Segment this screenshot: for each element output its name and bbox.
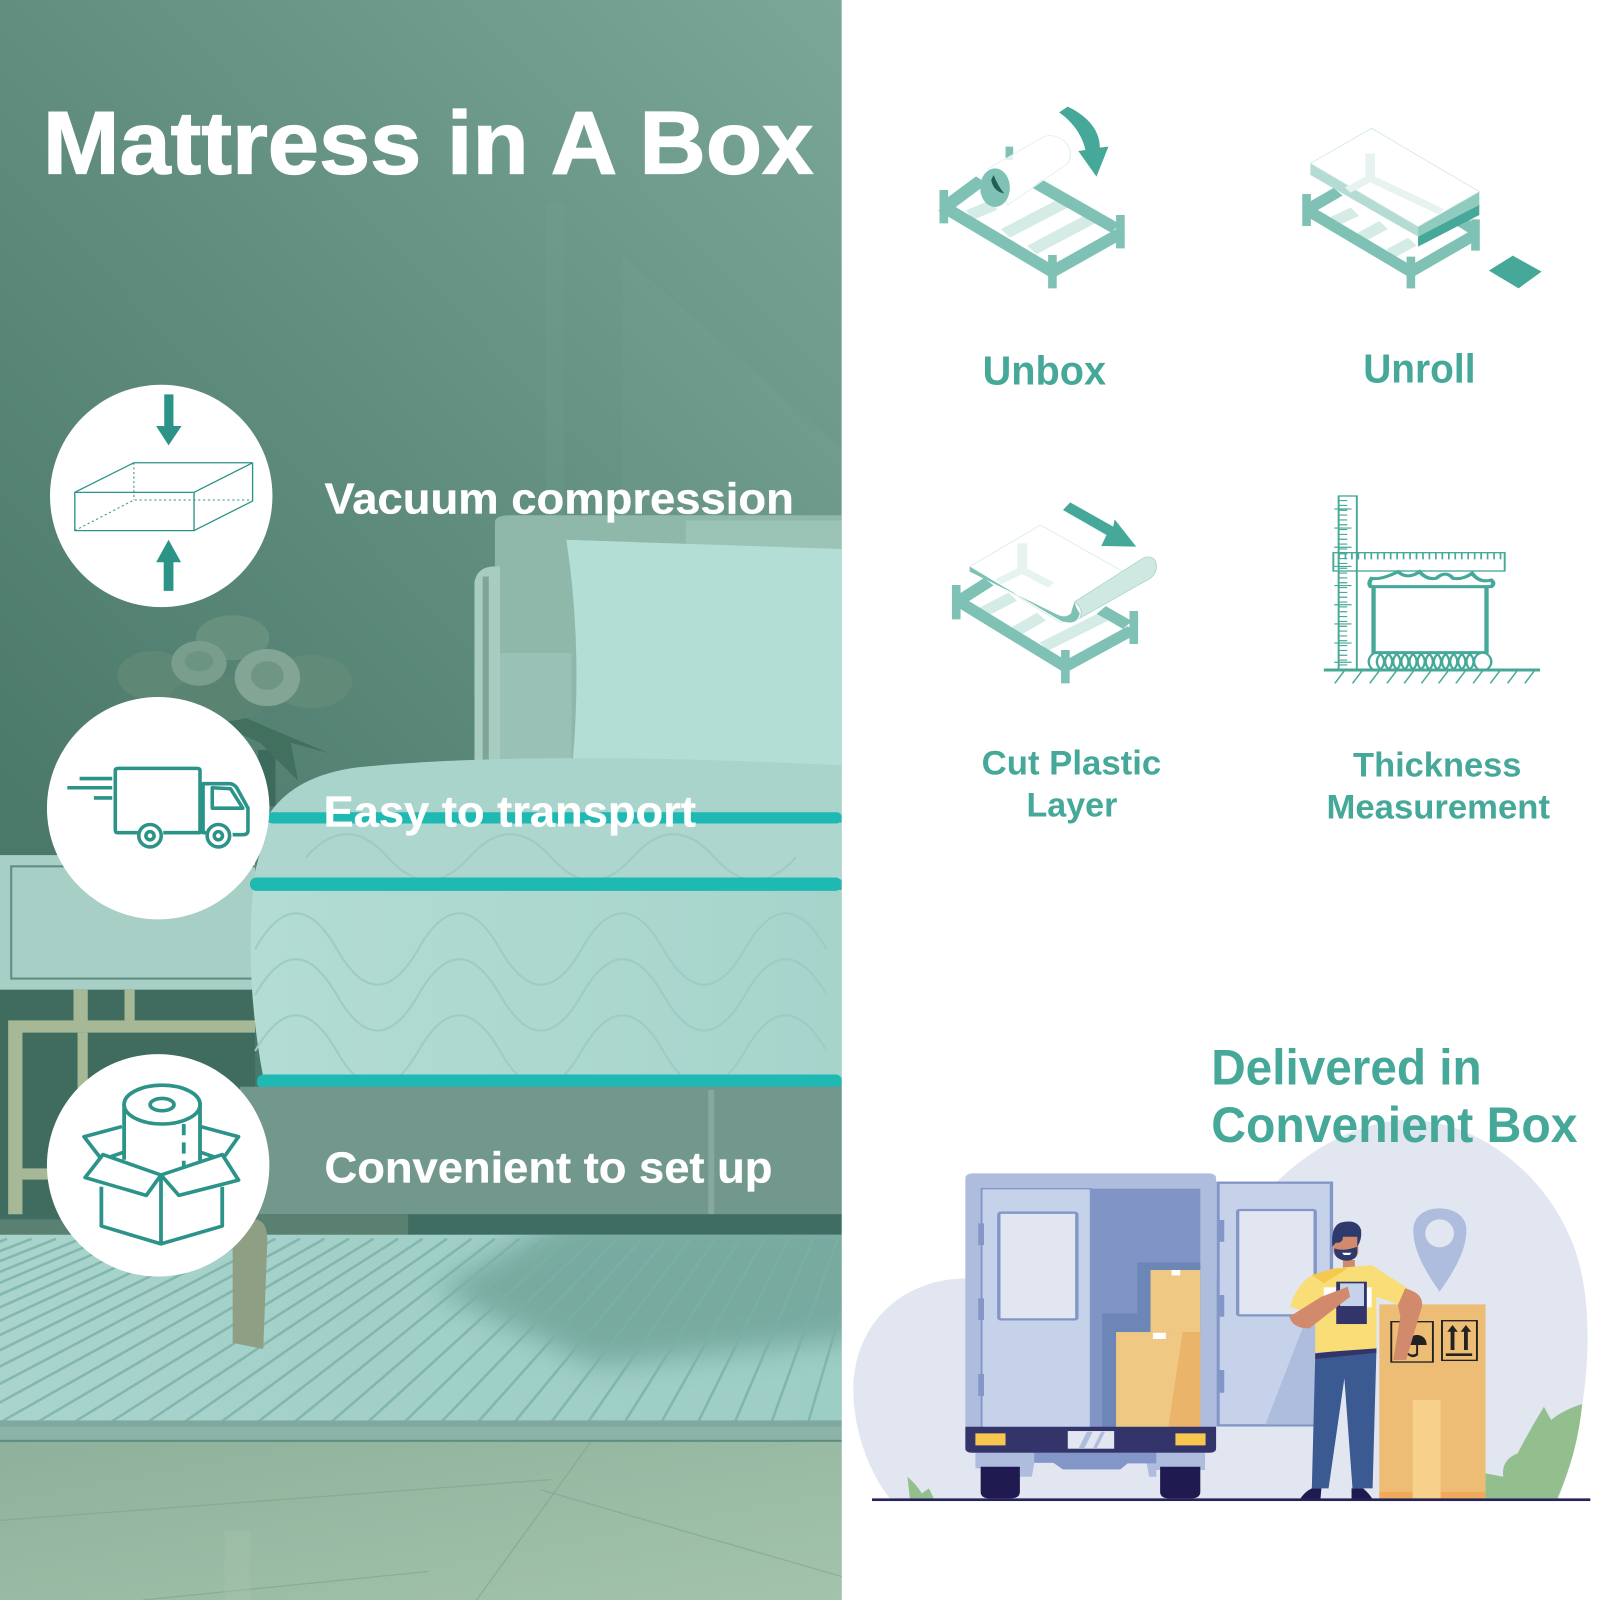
panel: right white background bbox=[842, 0, 1600, 1600]
nightstand bbox=[0, 855, 256, 1235]
label: cut plastic layer: Layer bbox=[1027, 786, 1117, 824]
heading: delivered in convenient box: Delivered in bbox=[1211, 1040, 1482, 1096]
heading: delivered in convenient box: Convenient Box bbox=[1211, 1097, 1578, 1153]
icon: cut plastic layer bbox=[952, 502, 1156, 683]
bed leg bbox=[233, 1219, 267, 1349]
open right door bbox=[1218, 1183, 1331, 1425]
icon: compressed box with arrows bbox=[75, 394, 253, 591]
background blob bbox=[853, 1120, 1588, 1499]
headboard bbox=[474, 515, 842, 776]
heading: delivered in convenient box bbox=[1211, 1040, 1578, 1153]
illustration: delivery scene bbox=[853, 1120, 1590, 1501]
bed base bbox=[0, 1087, 842, 1237]
flowers bbox=[117, 615, 352, 806]
label: cut plastic layer bbox=[982, 744, 1161, 824]
label: thickness measurement bbox=[1327, 747, 1550, 826]
label: unroll: Unroll bbox=[1363, 346, 1476, 392]
van bbox=[965, 1173, 1216, 1498]
icon: delivery truck bbox=[67, 768, 248, 847]
pillow bbox=[566, 540, 842, 776]
label: unbox: Unbox bbox=[983, 348, 1106, 394]
circle: vacuum compression icon bbox=[50, 385, 272, 607]
panel: left photo background bbox=[0, 0, 878, 1600]
text: vacuum compression: Vacuum compression bbox=[324, 474, 794, 523]
label: cut plastic layer: Cut Plastic bbox=[982, 744, 1161, 782]
big cardboard box bbox=[1379, 1304, 1486, 1498]
label: thickness measurement: Thickness bbox=[1353, 747, 1521, 785]
circle: set up icon bbox=[47, 1054, 269, 1277]
ground line bbox=[872, 1498, 1590, 1501]
label: thickness measurement: Measurement bbox=[1327, 788, 1550, 826]
rug bbox=[0, 1234, 842, 1442]
mattress upper layer bbox=[270, 758, 842, 816]
icon: unbox roll on bed frame bbox=[939, 107, 1125, 288]
icon: unrolled mattress on bed frame bbox=[1302, 128, 1542, 288]
mattress body bbox=[251, 822, 842, 1087]
wall light streak bbox=[546, 204, 842, 520]
icon: rolled mattress in box bbox=[84, 1085, 238, 1244]
icon: thickness measurement bbox=[1324, 496, 1540, 683]
floor bbox=[0, 1442, 842, 1600]
delivery man bbox=[1289, 1222, 1422, 1499]
plants bbox=[907, 1404, 1582, 1498]
text: convenient to set up: Convenient to set up bbox=[324, 1144, 772, 1193]
circle: transport icon bbox=[47, 697, 269, 919]
title: Mattress in A Box bbox=[43, 93, 813, 192]
text: easy to transport: Easy to transport bbox=[323, 788, 696, 837]
location pin bbox=[1413, 1208, 1466, 1292]
mattress piping bands bbox=[250, 812, 842, 1089]
